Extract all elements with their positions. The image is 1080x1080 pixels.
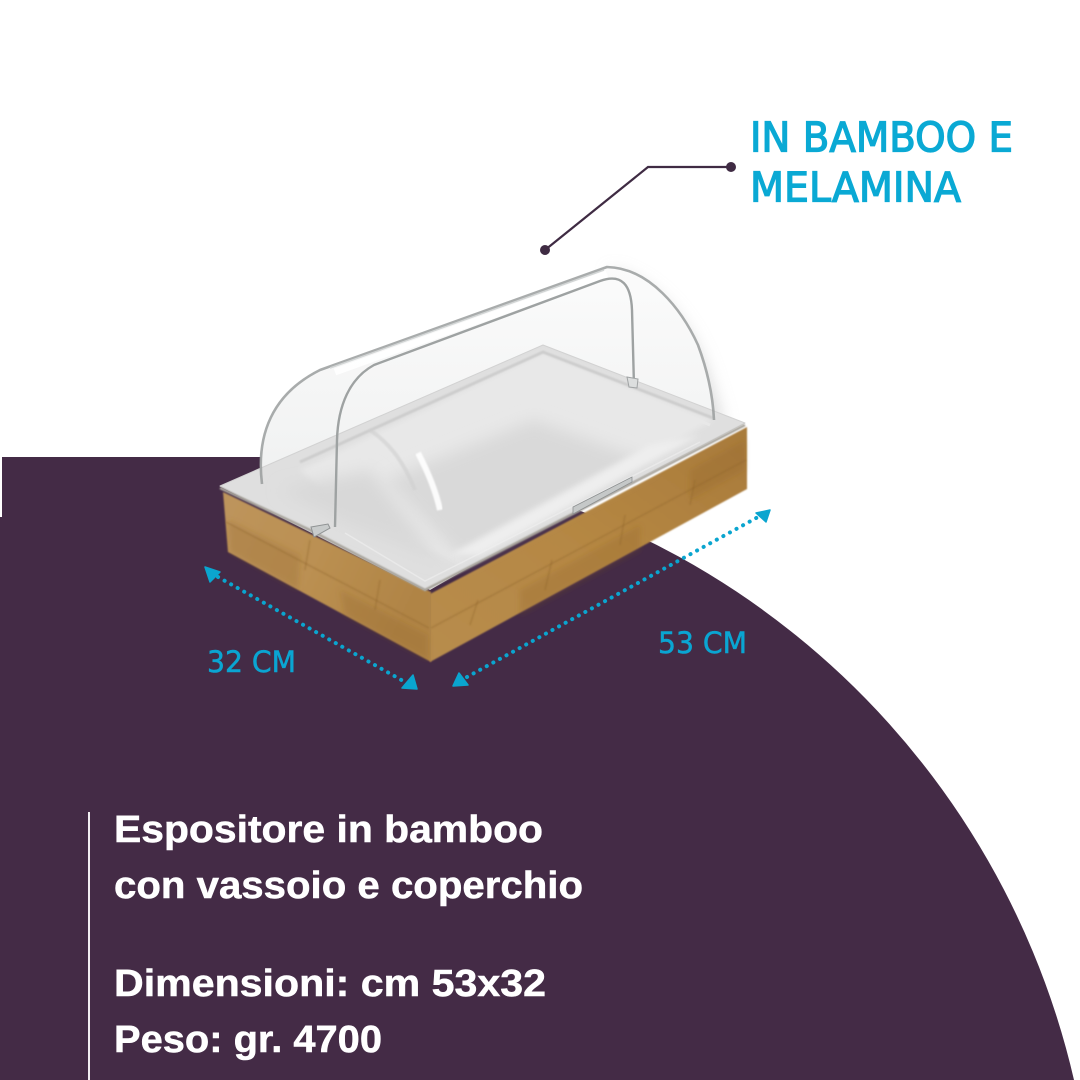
product description: con vassoio e coperchio (114, 865, 583, 907)
soft shadow around dome (610, 270, 724, 425)
hinge back (627, 377, 638, 388)
label: 53 cm: 53 CM (658, 626, 747, 660)
product specifications: Dimensioni: cm 53x32 (114, 963, 546, 1005)
product illustration: bamboo tray with dome (220, 267, 747, 662)
handle (573, 477, 632, 514)
purple background shape (0, 457, 1074, 1080)
dome white reflection (418, 453, 440, 510)
wood base right face (430, 427, 747, 662)
tray back rail (300, 352, 713, 462)
wood base left face (223, 492, 431, 662)
dome inner curve reflection (370, 430, 415, 490)
tray lower light band (450, 435, 700, 555)
tray inner floor (385, 420, 650, 560)
dimension arrow: 32 cm (205, 567, 417, 689)
product description: Espositore in bamboo (114, 809, 543, 851)
dome front and back arch (335, 279, 634, 527)
dome top band (335, 274, 607, 372)
tray inner walls (300, 352, 713, 565)
wood grain (226, 460, 746, 628)
product specifications (114, 963, 546, 1061)
tray left shade (280, 470, 440, 560)
callout: material label (750, 114, 1013, 212)
product description (114, 809, 583, 907)
wood dark patches (228, 440, 745, 660)
vertical divider (88, 812, 90, 1080)
product specifications: Peso: gr. 4700 (114, 1019, 382, 1061)
dome opaque backing (260, 267, 716, 590)
label: 32 cm: 32 CM (207, 645, 296, 679)
callout: material label: IN BAMBOO E (750, 114, 1013, 162)
dome outer edge (261, 267, 714, 484)
dimension arrow: 53 cm (453, 510, 770, 686)
tray top plate (220, 345, 745, 590)
callout leader line (540, 162, 736, 255)
hinge front (311, 524, 330, 537)
callout: material label: MELAMINA (750, 164, 961, 212)
tray metallic rim (220, 425, 745, 590)
